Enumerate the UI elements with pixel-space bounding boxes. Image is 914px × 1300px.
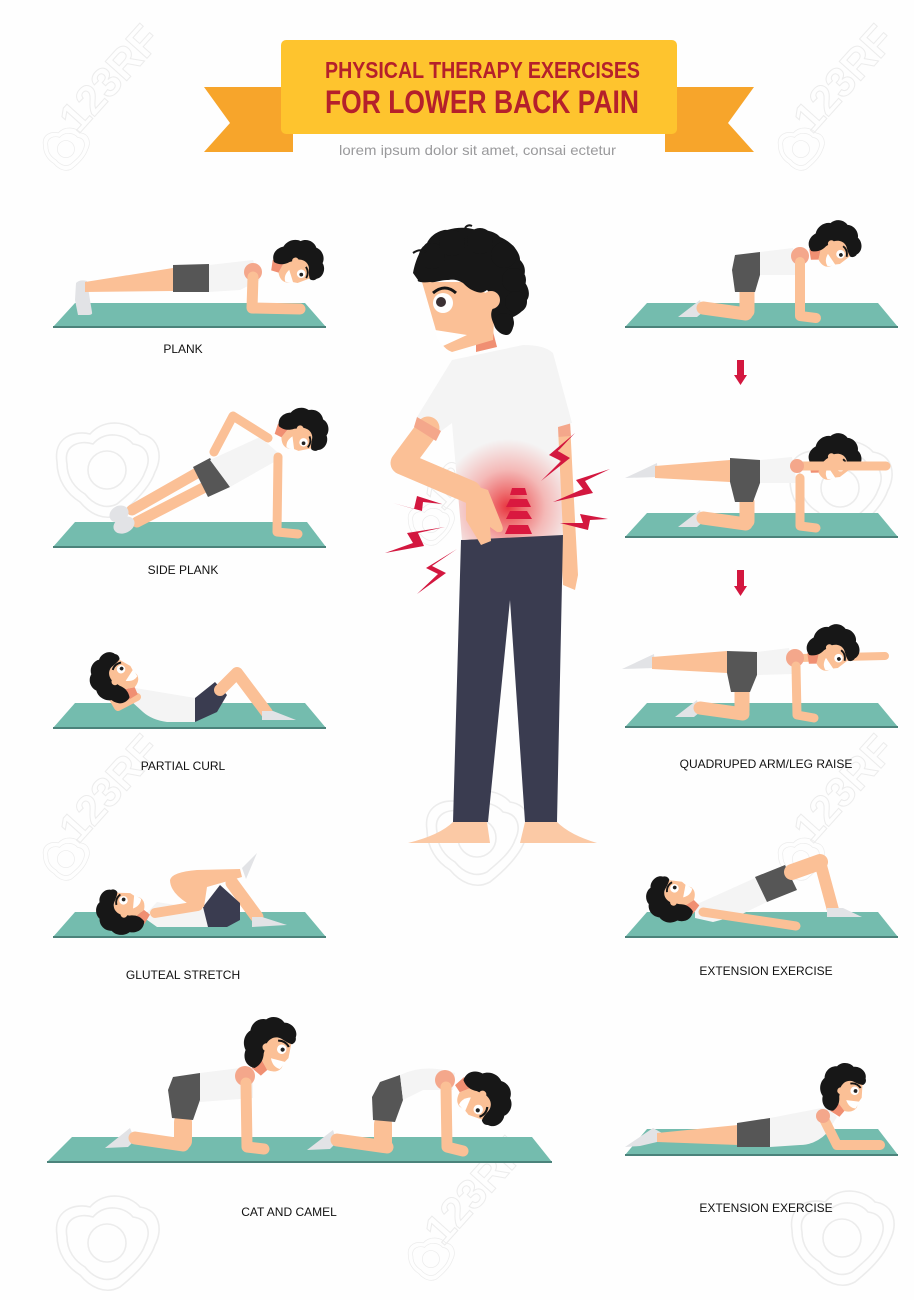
- shoulder: [244, 263, 262, 281]
- exercise: quadruped step 3: [622, 616, 898, 727]
- kneeling shoe: [678, 510, 703, 527]
- label: extension exercise 2: EXTENSION EXERCISE: [699, 1201, 833, 1215]
- shorts: [727, 651, 757, 692]
- mat: [53, 303, 326, 327]
- face: [422, 282, 495, 352]
- shorts: [195, 682, 227, 722]
- exercise: plank: [53, 235, 327, 327]
- raised arm: [797, 462, 886, 470]
- ribbon: left tail: [204, 87, 293, 152]
- label: extension exercise 1: EXTENSION EXERCISE: [699, 964, 833, 978]
- head: [797, 616, 865, 679]
- raised leg: [170, 869, 242, 907]
- shoe: [307, 1130, 337, 1150]
- shoulder: [786, 649, 804, 667]
- shoe on the mat: [252, 917, 287, 927]
- label: quadruped arm/leg raise: QUADRUPED ARM/LEG RAISE: [680, 757, 852, 771]
- exercise: side plank: [53, 408, 328, 547]
- neck: [476, 320, 497, 352]
- shirt: [210, 437, 283, 487]
- raised arm: [800, 656, 885, 658]
- shirt: [760, 457, 797, 483]
- title line 1: PHYSICAL THERAPY EXERCISES: [325, 57, 640, 83]
- head: [92, 887, 154, 940]
- shorts: [168, 1073, 200, 1120]
- shoulder: [816, 1109, 830, 1123]
- right arm: [558, 423, 578, 590]
- arm: [246, 1083, 264, 1149]
- pain bolts: [385, 433, 610, 594]
- shirt: [200, 1068, 253, 1102]
- shorts: [372, 1075, 403, 1122]
- sock: [75, 280, 92, 315]
- raised leg: [655, 460, 730, 482]
- supporting arm: [800, 478, 816, 528]
- supporting arm: [277, 457, 298, 534]
- exercise: extension (prone press): [625, 1058, 898, 1155]
- label: side plank: SIDE PLANK: [148, 563, 218, 577]
- shoulder: [791, 247, 809, 265]
- shoulder: [790, 459, 804, 473]
- mat: [625, 513, 898, 537]
- banner panel: [281, 40, 677, 134]
- supporting arm: [796, 666, 814, 718]
- arm: [800, 262, 816, 318]
- mouth: [435, 330, 467, 346]
- mat: [625, 1129, 898, 1155]
- arm: [703, 912, 796, 926]
- mat: [625, 912, 898, 937]
- shirt: [400, 1068, 455, 1100]
- head: [267, 235, 327, 287]
- kneeling shoe: [675, 700, 700, 717]
- subtitle: lorem ipsum dolor sit amet, consai ectetur: [339, 142, 616, 158]
- text: 123RF: [50, 16, 169, 141]
- shoe: [678, 300, 703, 317]
- text: 123RF: [784, 16, 903, 141]
- thigh: [792, 862, 820, 872]
- arm: [446, 1087, 463, 1151]
- left arm and hand: [402, 417, 503, 545]
- lower leg on the mat: [232, 883, 257, 917]
- exercise: cat and camel: [47, 1009, 552, 1162]
- ribbon: right tail: [665, 87, 754, 152]
- shorts: [203, 885, 240, 927]
- eye: [433, 293, 453, 313]
- shorts: [732, 252, 760, 292]
- kneeling leg: [700, 692, 743, 714]
- arm: [108, 690, 137, 707]
- leg: [703, 292, 747, 314]
- raised shoe: [242, 853, 257, 879]
- trousers: [453, 534, 563, 822]
- label: cat and camel: CAT AND CAMEL: [241, 1205, 337, 1219]
- text: 123RF: [784, 726, 903, 851]
- shoe: [105, 1128, 135, 1148]
- exercise: quadruped step 2: [625, 425, 898, 537]
- mat: [53, 912, 326, 937]
- mat: [47, 1137, 552, 1162]
- spine icon: [505, 488, 532, 534]
- text: 123RF: [415, 393, 534, 518]
- text: 123RF: [415, 1128, 534, 1253]
- shorts: [193, 458, 230, 497]
- shorts: [755, 865, 797, 902]
- exercise: extension (bridge): [625, 862, 898, 937]
- arrow: step 1 to step 2: [734, 360, 747, 385]
- arrow: step 2 to step 3: [734, 570, 747, 596]
- title line 2: FOR LOWER BACK PAIN: [325, 84, 639, 120]
- raised shoe: [625, 463, 658, 478]
- ear: [482, 291, 500, 309]
- camel pose figure: [307, 1060, 522, 1151]
- t-shirt with pain glow: [417, 345, 572, 540]
- leg: [337, 1124, 387, 1147]
- head: [80, 647, 149, 714]
- shirt: [132, 688, 195, 722]
- shorts: [730, 458, 760, 502]
- shirt: [695, 878, 767, 922]
- shoes: [106, 502, 137, 537]
- eyebrow: [433, 288, 456, 293]
- shoe: [827, 908, 862, 917]
- shorts: [173, 264, 209, 292]
- leg: [657, 1125, 738, 1145]
- exercise: quadruped step 1: [625, 212, 898, 327]
- arm: [823, 1117, 880, 1145]
- head: [814, 1058, 869, 1121]
- title banner: [204, 40, 754, 152]
- text: 123RF: [50, 726, 169, 851]
- label: partial curl: PARTIAL CURL: [141, 759, 226, 773]
- cat pose figure: [105, 1009, 301, 1149]
- leg: [135, 1122, 183, 1145]
- head: [799, 425, 867, 488]
- shirt: [760, 248, 797, 275]
- shoe: [625, 1128, 662, 1147]
- head: [445, 1060, 522, 1132]
- feet: [408, 822, 597, 843]
- head: [275, 408, 328, 451]
- label: gluteal stretch: GLUTEAL STRETCH: [126, 968, 240, 982]
- central figure: man with lower back pain: [385, 225, 610, 843]
- arm: [252, 277, 300, 309]
- calf: [820, 862, 833, 910]
- exercise: gluteal stretch: [53, 853, 326, 940]
- mat: [625, 703, 898, 727]
- leg: [220, 673, 267, 713]
- leg: [85, 268, 173, 292]
- mat: [625, 303, 898, 327]
- kneeling leg: [703, 502, 747, 524]
- shoulder: [435, 1070, 455, 1090]
- hair: [413, 225, 529, 335]
- label: plank: PLANK: [163, 342, 203, 356]
- raised shoe: [622, 654, 655, 669]
- head: [234, 1009, 301, 1083]
- shirt: [770, 1107, 837, 1147]
- raised leg: [652, 651, 727, 673]
- legs: [132, 473, 205, 522]
- shirt: [209, 260, 260, 292]
- shirt: [757, 648, 794, 675]
- shorts: [737, 1118, 770, 1147]
- shirt: [143, 902, 208, 927]
- mat: [53, 703, 326, 728]
- shoulder: [235, 1066, 255, 1086]
- arm: [155, 906, 198, 913]
- exercise: partial curl: [53, 647, 326, 728]
- head: [799, 212, 867, 275]
- mat: [53, 522, 326, 547]
- head: [640, 872, 705, 930]
- shoe: [262, 711, 296, 720]
- bent arm: [214, 416, 268, 452]
